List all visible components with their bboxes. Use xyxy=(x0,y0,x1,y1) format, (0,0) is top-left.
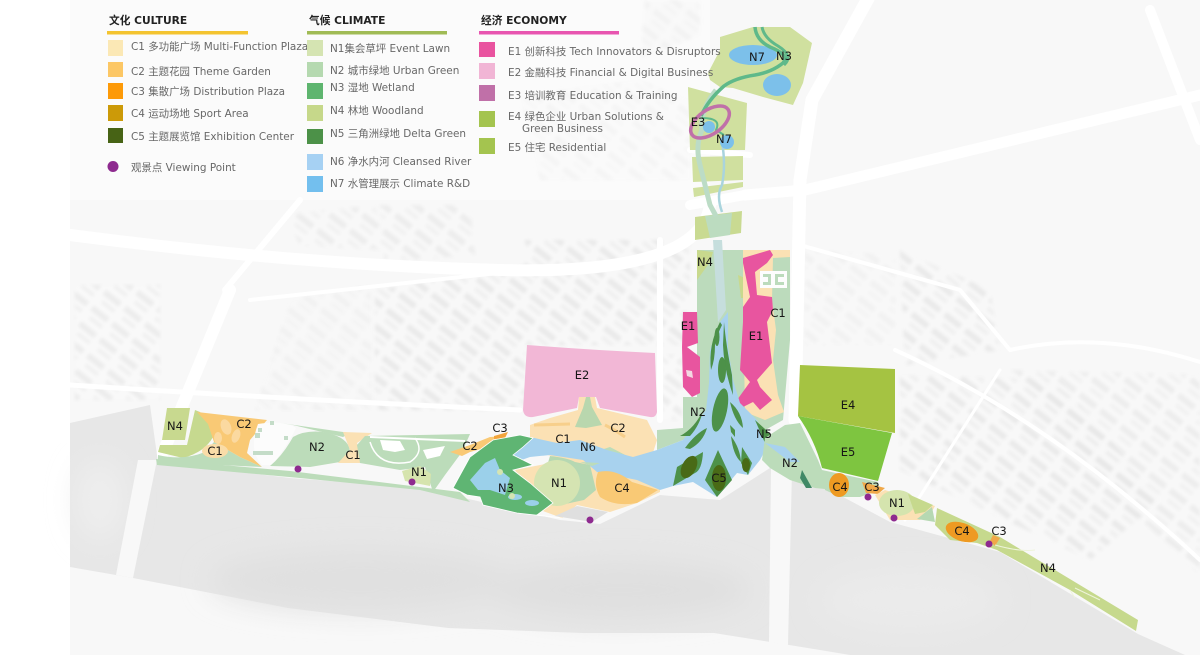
legend: economy: E1 创新科技 Tech Innovators & Disruptors xyxy=(508,45,721,58)
legend: economy: E4 绿色企业 Urban Solutions & xyxy=(508,110,664,123)
N5 delta green leaves and C5 exhibition pavilions xyxy=(673,322,785,497)
zone labels on map: C1 xyxy=(207,444,223,458)
west waterfront: N4, C1, C2, N2, N1 xyxy=(156,408,508,502)
zone labels on map: C1 xyxy=(770,306,786,320)
zone labels on map: E4 xyxy=(841,398,855,412)
zone labels on map: N6 xyxy=(580,440,596,454)
zone labels on map: N1 xyxy=(411,465,427,479)
zone labels on map: C1 xyxy=(555,432,571,446)
zone labels on map: E1 xyxy=(681,319,695,333)
central park: cream base, E2, C1, C2, C4, N1, N6 xyxy=(513,312,767,522)
E1 west block xyxy=(682,312,700,397)
river water and south bank xyxy=(70,405,1185,655)
zone labels on map: N7 xyxy=(749,50,765,64)
legend: culture xyxy=(107,14,308,174)
E2 financial district xyxy=(523,345,657,417)
zone labels on map: C2 xyxy=(462,439,478,453)
legend: culture: C4 运动场地 Sport Area xyxy=(131,107,249,120)
legend: climate: N3 湿地 Wetland xyxy=(330,81,415,94)
zone labels on map: N5 xyxy=(756,427,772,441)
zone labels on map: C4 xyxy=(614,481,630,495)
N3 stream xyxy=(701,27,785,116)
legend: climate: N2 城市绿地 Urban Green xyxy=(330,64,459,77)
legend: economy: E2 金融科技 Financial & Digital Business xyxy=(508,66,713,79)
west bridge xyxy=(116,460,157,578)
zone labels on map: N3 xyxy=(776,49,792,63)
legend: economy xyxy=(479,14,721,154)
zone labels on map: N7 xyxy=(716,132,732,146)
zone labels on map: N4 xyxy=(697,255,713,269)
zone labels on map: C3 xyxy=(991,524,1007,538)
north corridor: green blocks and upper stream xyxy=(685,27,812,240)
legend: economy: Green Business xyxy=(522,123,603,135)
zone labels on map: E3 xyxy=(691,115,705,129)
legend: culture: 观景点 Viewing Point xyxy=(131,162,236,174)
N7 ponds xyxy=(703,45,791,149)
legend: economy: 经济 ECONOMY xyxy=(481,14,567,27)
zone labels on map: N2 xyxy=(782,456,798,470)
legend: climate: N4 林地 Woodland xyxy=(330,104,424,117)
zone labels on map: C3 xyxy=(492,421,508,435)
zone labels on map xyxy=(167,49,1056,575)
legend: culture: C2 主题花园 Theme Garden xyxy=(131,65,271,78)
zone labels on map: C1 xyxy=(345,448,361,462)
legend: economy: E3 培训教育 Education & Training xyxy=(508,89,678,102)
zone labels on map: C2 xyxy=(610,421,626,435)
zone labels on map: E5 xyxy=(841,445,855,459)
central corridor: N2, N4, C1 and E1 xyxy=(657,240,790,450)
legend: culture: C1 多功能广场 Multi-Function Plaza xyxy=(131,40,308,53)
legend: climate: N1集会草坪 Event Lawn xyxy=(330,42,450,55)
legend: culture: C3 集散广场 Distribution Plaza xyxy=(131,85,285,98)
legend: climate: 气候 CLIMATE xyxy=(309,14,385,27)
zone labels on map: N4 xyxy=(167,419,183,433)
viewing points xyxy=(294,466,992,548)
legend: climate: N5 三角洲绿地 Delta Green xyxy=(330,127,466,140)
C1 cream edge xyxy=(743,250,790,420)
legend: economy: E5 住宅 Residential xyxy=(508,141,606,154)
legend: culture: C5 主题展览馆 Exhibition Center xyxy=(131,130,295,143)
zone labels on map: N1 xyxy=(551,476,567,490)
legend: culture: 文化 CULTURE xyxy=(109,14,187,27)
zone labels on map: N2 xyxy=(690,405,706,419)
legend: climate: N7 水管理展示 Climate R&D xyxy=(330,177,470,190)
zone labels on map: N4 xyxy=(1040,561,1056,575)
zone labels on map: C2 xyxy=(236,417,252,431)
zone labels on map: C5 xyxy=(711,471,727,485)
east bridge xyxy=(769,465,792,645)
zone labels on map: N1 xyxy=(889,496,905,510)
zone labels on map: C4 xyxy=(832,480,848,494)
C5 centres xyxy=(677,453,750,491)
C2 and C3 plaza xyxy=(450,436,506,456)
zone labels on map: C3 xyxy=(864,480,880,494)
zone labels on map: N3 xyxy=(498,481,514,495)
zone labels on map: N2 xyxy=(309,440,325,454)
zone labels on map: E1 xyxy=(749,329,763,343)
E3 ring xyxy=(685,100,735,144)
legend: climate: N6 净水内河 Cleansed River xyxy=(330,155,472,168)
zone labels on map: E2 xyxy=(575,368,589,382)
N6 river xyxy=(513,312,767,497)
legend: climate xyxy=(307,14,472,192)
east waterfront: N2, E4, E5, C4, C3, N1, N4 xyxy=(762,365,1138,631)
zone labels on map: C4 xyxy=(954,524,970,538)
E1 east block xyxy=(737,250,773,410)
N3 wetland xyxy=(453,435,562,518)
